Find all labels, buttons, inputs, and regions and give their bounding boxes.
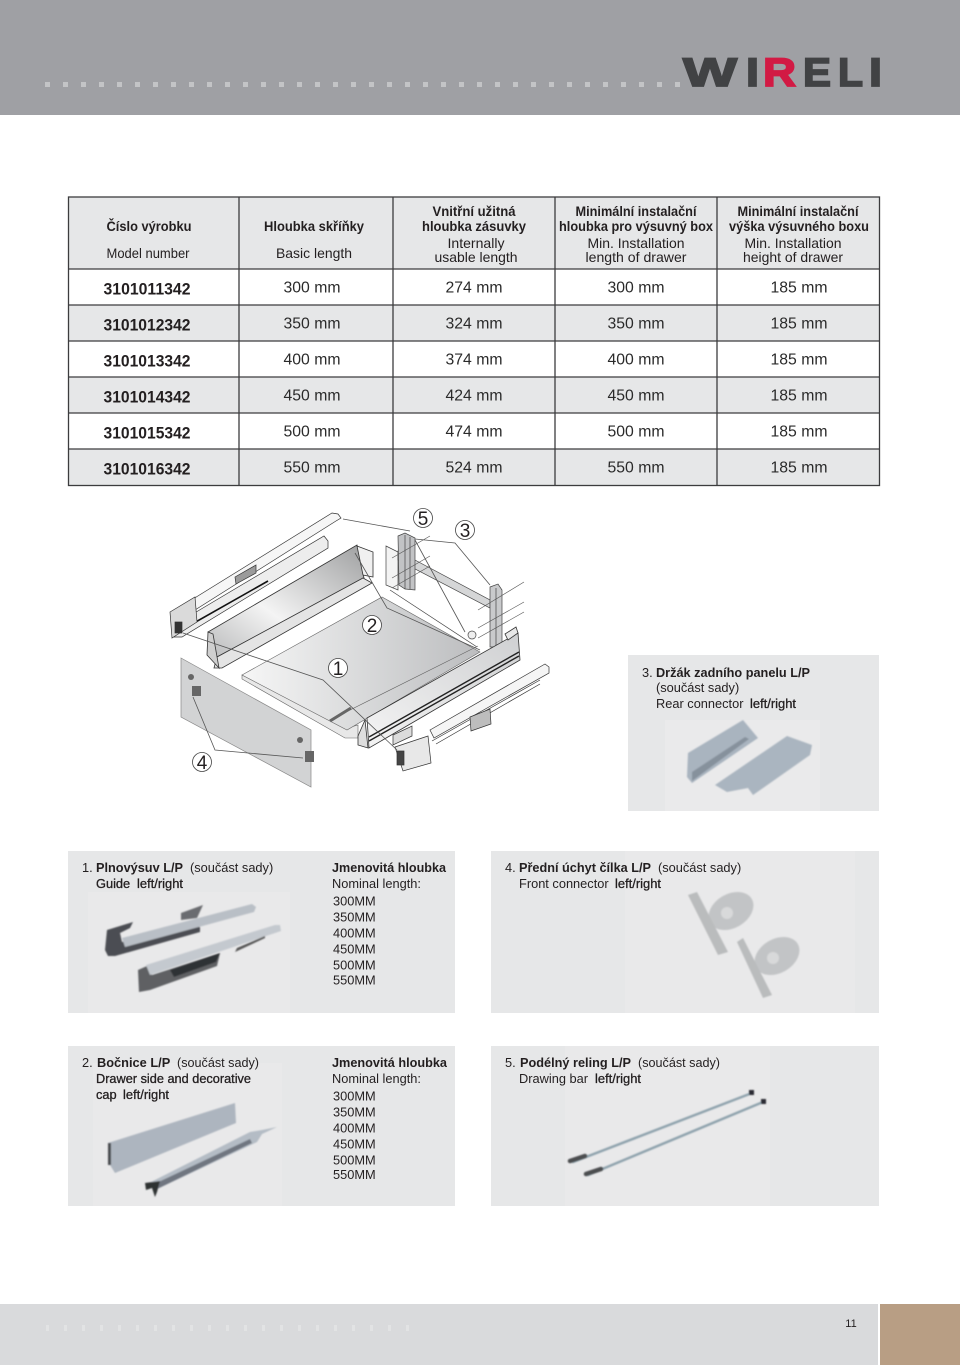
guide nominal lengths: Nominal length: [332,876,421,891]
logo: WIRELI: R [763,51,796,95]
table rows: 274 mm [446,280,502,296]
guide text: left/right [137,876,183,891]
table header: length of drawer [586,249,687,265]
drawing bar text: (součást sady) [638,1055,720,1070]
guide nominal lengths: Jmenovitá hloubka [332,860,447,875]
drawing bar text: Drawing bar [519,1071,589,1086]
rear connector text: (součást sady) [656,680,739,695]
drawing bar text [505,1055,720,1086]
callout 2: 2 [367,616,377,637]
logo: WIRELI: W [683,51,737,95]
drawer side nominal lengths: 300MM [333,1088,376,1104]
table rows: 350 mm [608,316,664,332]
table rows: 350 mm [284,316,340,332]
drawer side nominal lengths: 350MM [333,1104,376,1120]
callout 2 [362,616,382,637]
table rows: 474 mm [446,424,502,440]
drawer side text: 2. [82,1055,93,1070]
panel: rear connector [628,655,879,811]
drawer side text: cap [96,1087,117,1102]
table rows: 185 mm [770,280,828,296]
table header: hloubka pro výsuvný box [559,218,713,234]
photo: drawer side and cap [108,1103,277,1197]
right side panel [358,627,520,748]
table header: výška výsuvného boxu [729,218,869,234]
table rows: 450 mm [608,388,664,404]
callout 3: 3 [460,521,470,542]
photo: front connectors [688,884,806,998]
table header: hloubka zásuvky [422,218,526,234]
front connector text [505,860,741,891]
table rows: 3101012342 [104,316,190,334]
right pull-out guide [393,664,549,771]
logo: WIRELI [683,51,882,95]
rear connector text: left/right [750,696,796,711]
table header: Vnitřní užitná [432,203,516,219]
front panel [181,658,314,787]
drawer side nominal lengths: 400MM [333,1120,376,1136]
guide nominal lengths: 400MM [333,926,376,940]
table rows [104,280,828,478]
table header: Model number [106,245,190,261]
front connector text: left/right [615,876,661,891]
drawer side nominal lengths: Nominal length: [332,1071,421,1086]
panel: front connector [491,851,879,1013]
callout 4: 4 [197,753,208,774]
table header: Číslo výrobku [106,217,192,234]
table header: Hloubka skříňky [264,218,364,234]
drawer side text: (součást sady) [177,1055,259,1070]
table rows: 185 mm [770,388,828,404]
table rows: 400 mm [284,352,340,368]
callout 3 [456,520,474,542]
panel: drawer side [68,1046,455,1206]
guide text: Guide [96,876,130,891]
logo: WIRELI: I [869,51,882,95]
table rows: 3101016342 [104,460,190,478]
callout 1 [328,658,348,680]
leader lines [183,519,490,758]
drawer bottom [242,597,480,738]
callout 4 [192,752,212,774]
rear connector text: Držák zadního panelu L/P [656,665,810,680]
rear connector text [642,665,810,711]
table rows: 500 mm [284,424,340,440]
guide text: Plnovýsuv L/P [96,860,183,875]
drawer side nominal lengths [332,1055,448,1182]
table rows: 185 mm [770,460,828,476]
drawing bar text: 5. [505,1055,516,1070]
table header: usable length [434,249,518,265]
logo: WIRELI: L [838,51,863,95]
drawer side text: Drawer side and decorative [96,1071,251,1086]
header band [0,0,960,115]
photo: guides [105,904,281,992]
table rows: 3101013342 [104,352,190,370]
table rows: 185 mm [770,316,828,332]
table rows: 374 mm [446,352,502,368]
drawer side nominal lengths: 550MM [333,1167,376,1182]
callout 5 [414,508,432,530]
exploded drawer diagram [170,508,549,787]
table rows: 424 mm [446,388,502,404]
front connector text: (součást sady) [658,860,741,875]
guide text: (součást sady) [190,860,273,875]
specification table [68,197,880,486]
table header [106,203,869,265]
guide text: 1. [82,860,93,875]
guide nominal lengths: 500MM [333,958,376,972]
table header: Min. Installation [744,235,842,251]
table rows: 185 mm [770,424,828,440]
table header: Basic length [276,245,352,261]
table rows: 400 mm [608,352,664,368]
table rows: 500 mm [608,424,664,440]
table header: Internally [448,235,504,251]
drawing bar text: Podélný reling L/P [520,1055,631,1070]
guide nominal lengths [332,860,447,988]
callout 1: 1 [333,659,343,680]
guide nominal lengths: 300MM [333,894,376,908]
table rows: 300 mm [608,280,664,296]
table header: Min. Installation [588,235,684,251]
drawer side text: left/right [123,1087,169,1102]
table rows: 324 mm [446,316,502,332]
table rows: 450 mm [284,388,340,404]
rear connector text: Rear connector [656,696,744,711]
table header: Minimální instalační [738,203,860,219]
rear panel and posts [386,533,524,647]
photo: rear connectors [687,720,812,795]
table rows: 3101011342 [104,280,190,298]
table rows: 550 mm [608,460,664,476]
drawer side text: Bočnice L/P [97,1055,171,1070]
table header: height of drawer [743,249,843,265]
footer band [0,1304,960,1365]
left side panel [207,545,373,668]
drawing bar text: left/right [595,1071,641,1086]
drawer side nominal lengths: 500MM [333,1152,376,1168]
front connector text: 4. [505,860,516,875]
panel: guide [68,851,455,1013]
callout 5: 5 [418,509,428,530]
drawer side nominal lengths: 450MM [333,1136,376,1152]
table rows: 3101014342 [104,388,190,406]
table backgrounds [68,197,880,486]
panel: drawing bar [491,1046,879,1206]
photo: drawing bars [570,1090,766,1175]
logo: WIRELI: E [803,51,831,95]
table rows: 3101015342 [104,424,190,442]
table rows: 185 mm [770,352,828,368]
guide nominal lengths: 350MM [333,910,376,924]
front connector text: Front connector [519,876,609,891]
rear connector text: 3. [642,665,653,680]
table rows: 524 mm [446,460,502,476]
drawer side text [82,1055,259,1102]
drawer side nominal lengths: Jmenovitá hloubka [332,1055,448,1070]
page number: 11 [845,1318,857,1330]
table header: Minimální instalační [576,203,698,219]
left pull-out guide [170,513,341,638]
front connector text: Přední úchyt čílka L/P [519,860,651,875]
guide nominal lengths: 550MM [333,972,376,988]
guide nominal lengths: 450MM [333,942,376,956]
guide text [82,860,273,891]
table rows: 300 mm [284,280,340,296]
logo: WIRELI: I [746,51,759,95]
table rows: 550 mm [284,460,340,476]
